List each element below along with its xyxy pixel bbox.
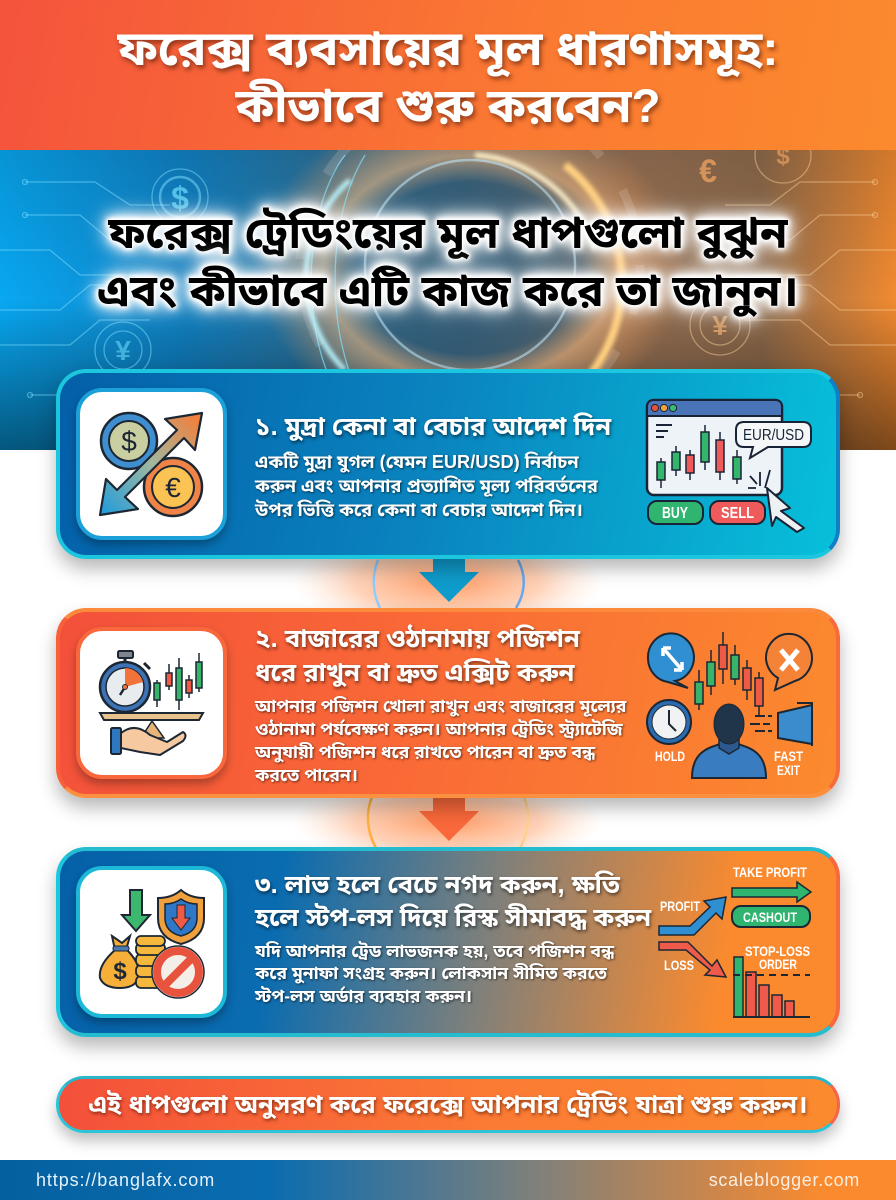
step 3 body	[254, 940, 616, 1006]
icon: stopwatch on balance	[98, 650, 205, 756]
step 2 illustration: hold or fast exit: EXIT	[777, 762, 800, 778]
step 1 illustration: trading window: SELL	[721, 505, 754, 522]
step 2 illustration: hold or fast exit: FAST	[774, 748, 803, 764]
step 1 illustration: trading window: BUY	[662, 505, 688, 522]
step 1 body: একটি মুদ্রা যুগল (যেমন EUR/USD) নির্বাচন	[255, 452, 579, 472]
step 3 heading: ৩. লাভ হলে বেচে নগদ করুন, ক্ষতি	[255, 871, 620, 899]
hero subtitle: এবং কীভাবে এটি কাজ করে তা জানুন।	[97, 267, 799, 316]
hero background with circuit pattern: ¥	[115, 335, 131, 366]
step 3 icon tile	[76, 866, 227, 1018]
title: কীভাবে শুরু করবেন?	[235, 80, 661, 133]
call-to-action banner	[56, 1076, 840, 1133]
step 2 body	[254, 696, 629, 785]
header band	[0, 0, 896, 150]
icon: money bag shield and stop sign	[98, 888, 205, 999]
step 3 illustration: take profit and stop loss: PROFIT	[660, 898, 700, 914]
step 3 illustration: take profit and stop loss	[658, 864, 812, 1018]
footer link right: scaleblogger.com	[709, 1170, 860, 1190]
step 2 illustration: hold or fast exit: HOLD	[655, 748, 685, 764]
step 3 heading: হলে স্টপ-লস দিয়ে রিস্ক সীমাবদ্ধ করুন	[255, 904, 651, 932]
hero background with circuit pattern: €	[699, 153, 717, 189]
step 3 heading	[254, 870, 654, 934]
glow between cards	[304, 559, 592, 847]
step 2 heading: ২. বাজারের ওঠানামায় পজিশন	[255, 625, 580, 653]
step 2 icon tile	[76, 627, 227, 779]
step 1 illustration: trading window: EUR/USD	[743, 427, 804, 444]
step 2 body: অনুযায়ী পজিশন ধরে রাখতে পারেন বা দ্রুত বন্ধ	[255, 742, 595, 762]
step 1 body: করুন এবং আপনার প্রত্যাশিত মূল্য পরিবর্তনের	[255, 476, 598, 496]
step 2 illustration: hold or fast exit	[646, 632, 813, 779]
step 3 body: যদি আপনার ট্রেড লাভজনক হয়, তবে পজিশন বন্ধ	[255, 941, 614, 961]
step 1 heading: ১. মুদ্রা কেনা বা বেচার আদেশ দিন	[255, 413, 611, 441]
step 1 body	[254, 451, 600, 520]
step 1 icon tile	[76, 388, 227, 540]
icon: money bag shield and stop sign: $	[113, 958, 127, 985]
connector arrow 1	[419, 559, 479, 602]
hero background with circuit pattern: ¥	[712, 310, 728, 341]
footer bar	[0, 1160, 896, 1200]
hero subtitle: ফরেক্স ট্রেডিংয়ের মূল ধাপগুলো বুঝুন	[108, 209, 788, 258]
step 3 illustration: take profit and stop loss: CASHOUT	[743, 909, 797, 925]
step 2 heading	[255, 624, 583, 691]
step 3 body: স্টপ-লস অর্ডার ব্যবহার করুন।	[255, 986, 472, 1006]
hero background with circuit pattern	[0, 150, 896, 450]
panel: step 2	[56, 608, 840, 798]
title: ফরেক্স ব্যবসায়ের মূল ধারণাসমূহ:	[118, 22, 778, 76]
step 3 illustration: take profit and stop loss: LOSS	[664, 957, 694, 973]
title	[116, 22, 779, 133]
step 3 illustration: take profit and stop loss: ORDER	[759, 956, 797, 972]
panel: step 1	[56, 369, 840, 559]
step 3 body: করে মুনাফা সংগ্রহ করুন। লোকসান সীমিত করতে	[255, 963, 607, 983]
footer link left: https://banglafx.com	[36, 1170, 215, 1190]
step 2 body: আপনার পজিশন খোলা রাখুন এবং বাজারের মূল্যের	[255, 696, 626, 716]
hero subtitle	[80, 188, 815, 334]
call-to-action banner: এই ধাপগুলো অনুসরণ করে ফরেক্সে আপনার ট্রেডিং যাত্রা শুরু করুন।	[89, 1091, 807, 1119]
step 1 illustration: trading window	[646, 398, 812, 533]
panel: step 3	[56, 847, 840, 1037]
icon: dollar euro exchange: €	[165, 472, 181, 503]
icon: dollar euro exchange	[98, 412, 204, 518]
step 2 body: করতে পারেন।	[255, 765, 358, 785]
connector arrow 2	[419, 798, 479, 841]
step 1 body: উপর ভিত্তি করে কেনা বা বেচার আদেশ দিন।	[255, 500, 583, 520]
hero background with circuit pattern: $	[171, 180, 189, 216]
icon: dollar euro exchange: $	[121, 426, 137, 457]
step 2 heading: ধরে রাখুন বা দ্রুত এক্সিট করুন	[255, 659, 574, 687]
step 2 body: ওঠানামা পর্যবেক্ষণ করুন। আপনার ট্রেডিং স্ট্র্যাটেজি	[255, 719, 623, 739]
